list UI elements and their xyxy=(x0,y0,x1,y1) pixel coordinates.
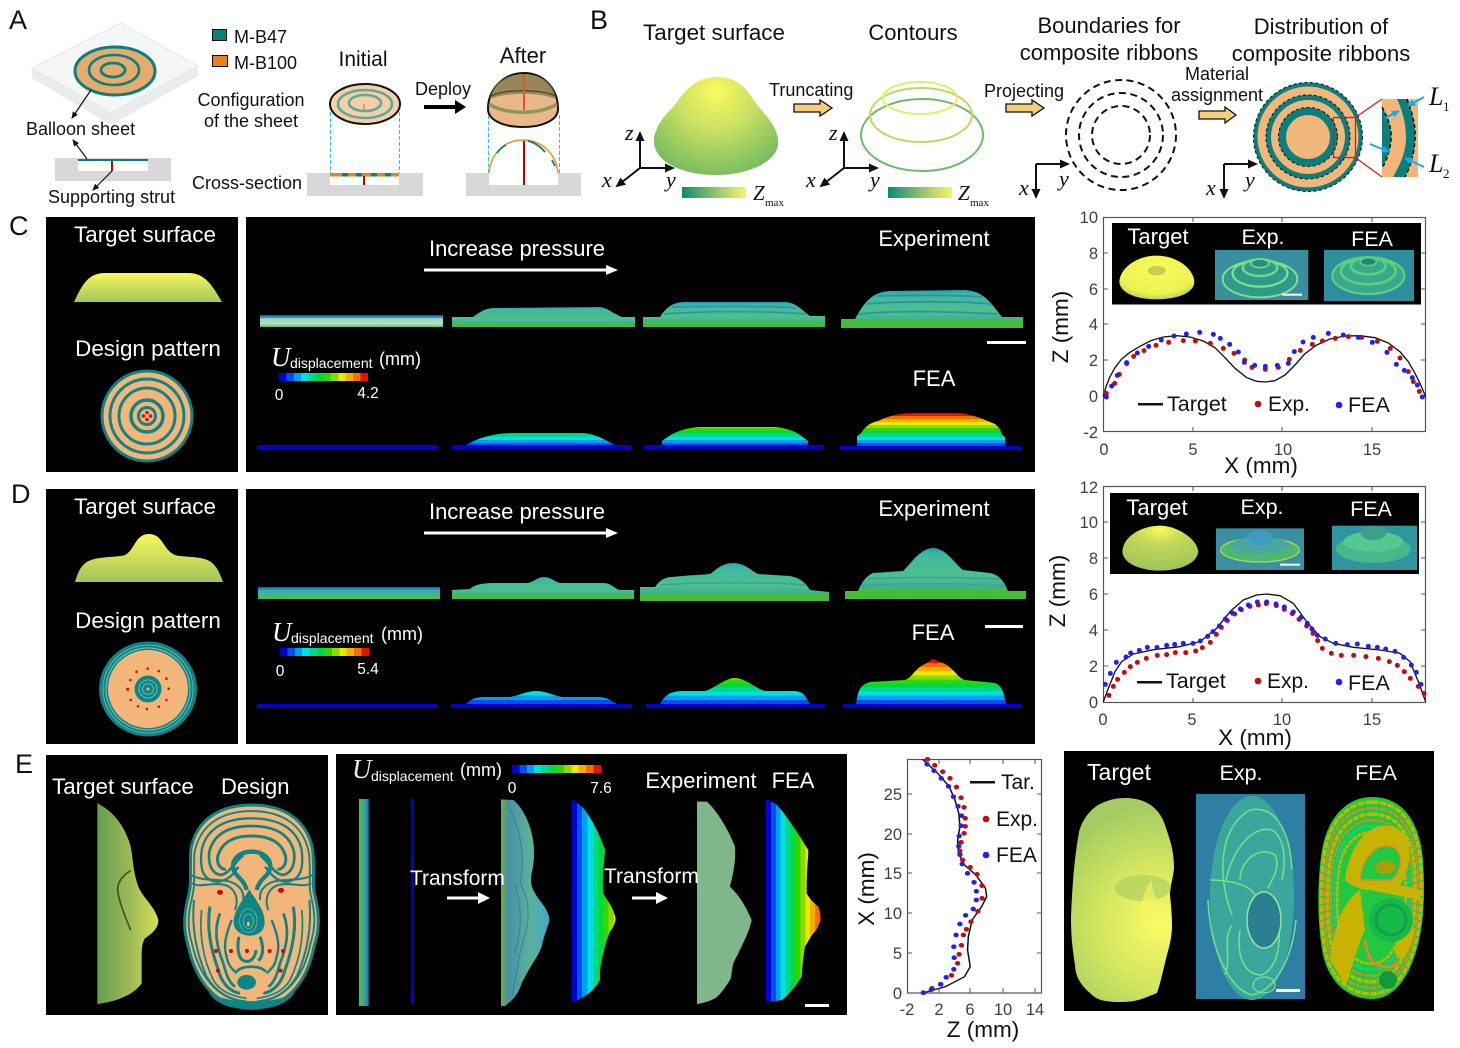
fea heading E: FEA xyxy=(772,768,815,793)
y axis title: X (mm) xyxy=(854,852,879,926)
label L2: 2 xyxy=(1443,166,1450,181)
axis labels 2: z xyxy=(828,120,838,145)
label L1 xyxy=(1428,82,1450,114)
axis labels 4 xyxy=(1205,167,1255,200)
arrow to balloon sheet xyxy=(72,90,91,118)
displacement legend E: 0 xyxy=(508,780,517,797)
displacement legend D: displacement xyxy=(291,630,374,646)
x tick labels xyxy=(1098,711,1381,729)
arrow to strut xyxy=(93,171,112,190)
increase pressure: Increase pressure xyxy=(429,499,605,524)
fea sample 3 xyxy=(644,427,824,449)
displacement legend C: 4.2 xyxy=(357,385,379,402)
legend M-B47: M-B47 xyxy=(234,27,287,47)
experiment heading: Experiment xyxy=(878,226,990,251)
displacement legend C: U xyxy=(271,342,292,372)
label E: E xyxy=(15,749,33,779)
transform label 2: Transform xyxy=(604,865,699,888)
initial sheet xyxy=(330,84,400,124)
experiment strip xyxy=(359,799,370,1006)
displacement legend C: 0 xyxy=(275,387,284,404)
y axis title: Z (mm) xyxy=(1048,291,1073,363)
experiment profile 1 xyxy=(501,799,549,1006)
target heading: Target xyxy=(1087,759,1152,785)
x tick labels: 15 xyxy=(1363,441,1381,459)
right black panel C xyxy=(246,217,1035,472)
fea profile 2 xyxy=(766,799,821,1003)
axis labels 1: y xyxy=(664,167,676,192)
fea sample 4 xyxy=(840,413,1022,450)
label A: A xyxy=(9,5,27,35)
truncating arrow xyxy=(794,100,832,116)
axes frame xyxy=(1103,217,1426,432)
experiment sample 3 xyxy=(643,302,825,327)
panel E xyxy=(15,749,1434,1042)
small cross-section xyxy=(55,158,171,181)
balloon sheet plate xyxy=(32,23,198,125)
increase pressure: Increase pressure xyxy=(429,236,605,261)
scale bar D xyxy=(985,625,1023,628)
configuration label: Configuration xyxy=(197,90,305,110)
experiment profile 2 xyxy=(697,802,752,1004)
legend D: Target xyxy=(1166,669,1226,693)
legend E: Tar. xyxy=(1001,771,1035,794)
y tick labels: 4 xyxy=(1089,622,1098,640)
target curve C xyxy=(1103,336,1426,397)
y tick labels: 10 xyxy=(1080,209,1098,227)
displacement legend E: displacement xyxy=(371,768,454,784)
displacement legend D: (mm) xyxy=(381,624,423,644)
color bar 1: max xyxy=(765,197,784,209)
y tick labels xyxy=(884,786,902,1003)
y tick labels: 5 xyxy=(893,945,902,963)
right black panel E xyxy=(1064,751,1434,1011)
displacement legend D xyxy=(272,617,423,680)
color bar 2: max xyxy=(970,197,989,209)
x tick labels: -2 xyxy=(900,1001,914,1019)
design pattern xyxy=(102,371,192,461)
face profile xyxy=(97,803,158,1004)
fea sample 4 xyxy=(843,659,1022,708)
fea sample 1 xyxy=(257,704,437,708)
legend C: FEA xyxy=(1348,393,1390,417)
contours xyxy=(861,82,983,171)
composite ribbon layout xyxy=(1254,82,1362,192)
exp heading: Exp. xyxy=(1219,761,1263,785)
label Initial: Initial xyxy=(338,48,388,71)
heading contours: Contours xyxy=(868,20,958,45)
scale bar C xyxy=(987,341,1026,344)
inset images C xyxy=(1112,223,1421,304)
displacement legend D: 5.4 xyxy=(357,661,379,678)
axis labels 1 xyxy=(601,120,676,192)
projecting arrow xyxy=(1006,100,1044,116)
deploy label: Deploy xyxy=(415,79,471,99)
experiment sample 3 xyxy=(640,563,829,601)
projecting label: Projecting xyxy=(984,81,1064,101)
experiment heading E: Experiment xyxy=(645,768,757,793)
y tick labels: 20 xyxy=(884,826,902,844)
y tick labels: 6 xyxy=(1089,586,1098,604)
experiment points C xyxy=(1104,334,1422,396)
target surface egg xyxy=(654,77,778,175)
label L2 xyxy=(1428,149,1450,181)
heading target surface: Target surface xyxy=(643,20,785,45)
x tick labels: 14 xyxy=(1026,1001,1044,1019)
face design pattern xyxy=(185,805,318,1009)
design pattern heading: Design pattern xyxy=(75,608,221,633)
axis labels 3 xyxy=(1018,166,1069,200)
legend E xyxy=(970,771,1038,867)
chart D xyxy=(1045,479,1426,750)
y tick labels: 6 xyxy=(1089,281,1098,299)
x axis title: X (mm) xyxy=(1218,725,1292,750)
y tick labels: 25 xyxy=(884,786,902,804)
target mask xyxy=(1071,798,1174,1002)
legend D xyxy=(1137,669,1390,695)
target curve D xyxy=(1103,594,1426,702)
x tick labels: 6 xyxy=(965,1001,975,1019)
material assignment label xyxy=(1171,64,1263,105)
y tick labels: 8 xyxy=(1089,550,1098,568)
target profile xyxy=(75,534,223,582)
label D: D xyxy=(11,479,30,509)
experiment sample 1 xyxy=(260,315,443,327)
arrow up to sheet xyxy=(73,140,87,159)
left black panel D xyxy=(46,489,238,744)
displacement legend E: 7.6 xyxy=(590,780,612,797)
transform arrow 2 xyxy=(632,892,668,904)
axis labels 2: x xyxy=(805,167,816,192)
x axis title: X (mm) xyxy=(1224,453,1298,478)
target curve E xyxy=(923,759,987,993)
inset images D: Exp. xyxy=(1240,495,1284,519)
configuration label: of the sheet xyxy=(204,111,298,131)
legend E: Exp. xyxy=(996,808,1038,831)
displacement legend E xyxy=(352,754,612,797)
projection lines initial xyxy=(330,112,400,173)
balloon sheet label: Balloon sheet xyxy=(26,119,135,139)
experiment sample 2 xyxy=(452,577,634,599)
axes 2 xyxy=(821,133,877,186)
heading distribution: composite ribbons xyxy=(1232,41,1410,66)
x tick labels xyxy=(900,1001,1044,1019)
inset images C: Exp. xyxy=(1241,225,1285,249)
heading distribution: Distribution of xyxy=(1254,14,1389,39)
fea sample 3 xyxy=(646,678,825,708)
y tick labels: 2 xyxy=(1089,658,1098,676)
initial cross-section xyxy=(307,173,423,196)
red zoom box xyxy=(1334,99,1382,177)
displacement legend C xyxy=(271,342,421,404)
label L1: 1 xyxy=(1443,99,1450,114)
axis labels 3: y xyxy=(1057,166,1069,191)
x tick labels: 0 xyxy=(1098,711,1108,729)
design pattern heading: Design pattern xyxy=(75,336,221,361)
y tick labels: 10 xyxy=(884,905,902,923)
axis labels 1: z xyxy=(624,120,634,145)
x tick labels: 10 xyxy=(994,1001,1012,1019)
experiment sample 2 xyxy=(452,307,635,327)
label L2: L xyxy=(1428,149,1443,178)
axis labels 3: x xyxy=(1018,175,1029,200)
left black panel C xyxy=(46,217,238,472)
y tick labels: 15 xyxy=(884,865,902,883)
after cross-section xyxy=(466,140,581,196)
axes 1 xyxy=(617,133,673,186)
heading boundaries: composite ribbons xyxy=(1020,40,1198,65)
fea heading: FEA xyxy=(1355,761,1398,785)
x tick labels: 5 xyxy=(1188,441,1198,459)
inset images D xyxy=(1110,493,1419,574)
y tick labels: 0 xyxy=(1089,388,1098,406)
fea heading: FEA xyxy=(913,366,956,391)
target surface heading: Target surface xyxy=(74,494,216,519)
experiment sample 4 xyxy=(845,548,1026,599)
label C: C xyxy=(9,211,28,241)
legend C: Target xyxy=(1167,392,1227,416)
axes 4 xyxy=(1224,164,1256,197)
chart E xyxy=(854,757,1044,1042)
axis labels 4: y xyxy=(1243,167,1255,192)
displacement legend D: 0 xyxy=(276,663,285,680)
label After: After xyxy=(500,43,546,68)
left black panel E xyxy=(46,755,328,1015)
y tick labels: 8 xyxy=(1089,245,1098,263)
fea mask xyxy=(1315,795,1427,1001)
fea points D xyxy=(1103,599,1423,687)
material assignment label: Material xyxy=(1185,64,1249,84)
heading distribution xyxy=(1232,14,1410,66)
experiment heading: Experiment xyxy=(878,496,990,521)
width arrows xyxy=(1370,97,1424,167)
x tick labels: 10 xyxy=(1273,711,1291,729)
target surface heading: Target surface xyxy=(52,774,194,799)
transform label 1: Transform xyxy=(410,867,505,890)
experiment sample 1 xyxy=(258,587,440,599)
displacement legend E: (mm) xyxy=(460,760,502,780)
faces in profile xyxy=(501,799,821,1006)
x tick labels: 2 xyxy=(934,1001,944,1019)
displacement legend C: (mm) xyxy=(379,349,421,369)
axes frame xyxy=(1103,486,1426,703)
legend M-B100: M-B100 xyxy=(234,53,297,73)
chart C xyxy=(1048,209,1426,478)
x tick labels: 0 xyxy=(1099,441,1109,459)
fea points E xyxy=(921,762,979,995)
cross-section label: Cross-section xyxy=(192,173,302,193)
panel B: design workflow xyxy=(590,5,1450,209)
inset images D: Target xyxy=(1126,495,1188,520)
x tick labels: 5 xyxy=(1187,711,1197,729)
truncating label: Truncating xyxy=(769,80,853,100)
design heading: Design xyxy=(221,774,289,799)
legend C: Exp. xyxy=(1268,393,1310,416)
x tick labels: 15 xyxy=(1363,711,1381,729)
experiment mask xyxy=(1196,794,1305,1000)
inset images C: FEA xyxy=(1351,227,1394,251)
inset images D: FEA xyxy=(1350,497,1393,521)
axis labels 1: x xyxy=(601,167,612,192)
fea sample 2 xyxy=(451,691,631,708)
displacement legend E: U xyxy=(352,754,373,784)
after dome xyxy=(488,73,558,127)
material assignment label: assignment xyxy=(1171,85,1263,105)
color bar 1: Z xyxy=(753,181,765,205)
configuration label xyxy=(197,90,305,131)
y tick labels xyxy=(1080,209,1098,442)
supporting strut label: Supporting strut xyxy=(48,187,175,207)
axis labels 2 xyxy=(805,120,880,192)
fea sample 1 xyxy=(257,445,437,449)
color bar 2 xyxy=(888,181,989,209)
legend D: FEA xyxy=(1348,671,1390,695)
legend D: Exp. xyxy=(1267,670,1309,693)
experiment points E xyxy=(921,757,985,995)
y tick labels: 0 xyxy=(893,985,902,1003)
fea strip xyxy=(411,799,414,1003)
color bar 1 xyxy=(682,181,784,209)
heading boundaries xyxy=(1020,13,1198,65)
projection lines after xyxy=(488,115,560,173)
axes frame xyxy=(907,759,1042,993)
y tick labels: 10 xyxy=(1080,514,1098,532)
legend E: FEA xyxy=(996,844,1037,867)
panel A: balloon sheet mechanism xyxy=(9,5,581,207)
y tick labels: 12 xyxy=(1080,479,1098,497)
displacement legend C: displacement xyxy=(290,355,373,371)
scale bar E xyxy=(805,1004,829,1007)
fea points C xyxy=(1104,330,1425,399)
fea sample 2 xyxy=(452,433,631,449)
y axis title: Z (mm) xyxy=(1045,555,1070,627)
experiment sample 4 xyxy=(841,290,1023,328)
y tick labels: 4 xyxy=(1089,316,1098,334)
x tick labels xyxy=(1099,441,1381,459)
material arrow xyxy=(1199,107,1236,123)
heading boundaries: Boundaries for xyxy=(1037,13,1181,38)
label B: B xyxy=(590,5,608,35)
experiment points D xyxy=(1106,601,1426,698)
design pattern xyxy=(99,642,197,736)
increase pressure xyxy=(424,499,618,538)
fea profile 1 xyxy=(572,799,616,1003)
x tick labels: 10 xyxy=(1274,441,1292,459)
deploy arrow xyxy=(424,100,466,114)
dashed boundaries xyxy=(1066,80,1176,190)
target surface heading: Target surface xyxy=(74,222,216,247)
target profile xyxy=(74,273,222,302)
y tick labels: -2 xyxy=(1083,424,1098,442)
fea heading: FEA xyxy=(912,620,955,645)
color bar 2: Z xyxy=(958,181,970,205)
panel D xyxy=(11,479,1426,750)
increase pressure xyxy=(424,236,618,275)
y tick labels xyxy=(1080,479,1098,712)
axes 3 xyxy=(1036,164,1068,197)
panel C xyxy=(9,209,1426,478)
y tick labels: 2 xyxy=(1089,352,1098,370)
axis labels 4: x xyxy=(1205,175,1216,200)
middle black panel E xyxy=(336,754,847,1015)
label L1: L xyxy=(1428,82,1443,111)
transform arrow 1 xyxy=(447,892,490,904)
axis labels 2: y xyxy=(868,167,880,192)
legend C xyxy=(1138,392,1390,417)
inset images C: Target xyxy=(1127,224,1189,249)
displacement legend D: U xyxy=(272,617,293,647)
x axis title: Z (mm) xyxy=(947,1017,1019,1042)
y tick labels: 0 xyxy=(1089,694,1098,712)
right black panel D xyxy=(246,489,1035,744)
zoomed inset xyxy=(1382,99,1418,177)
